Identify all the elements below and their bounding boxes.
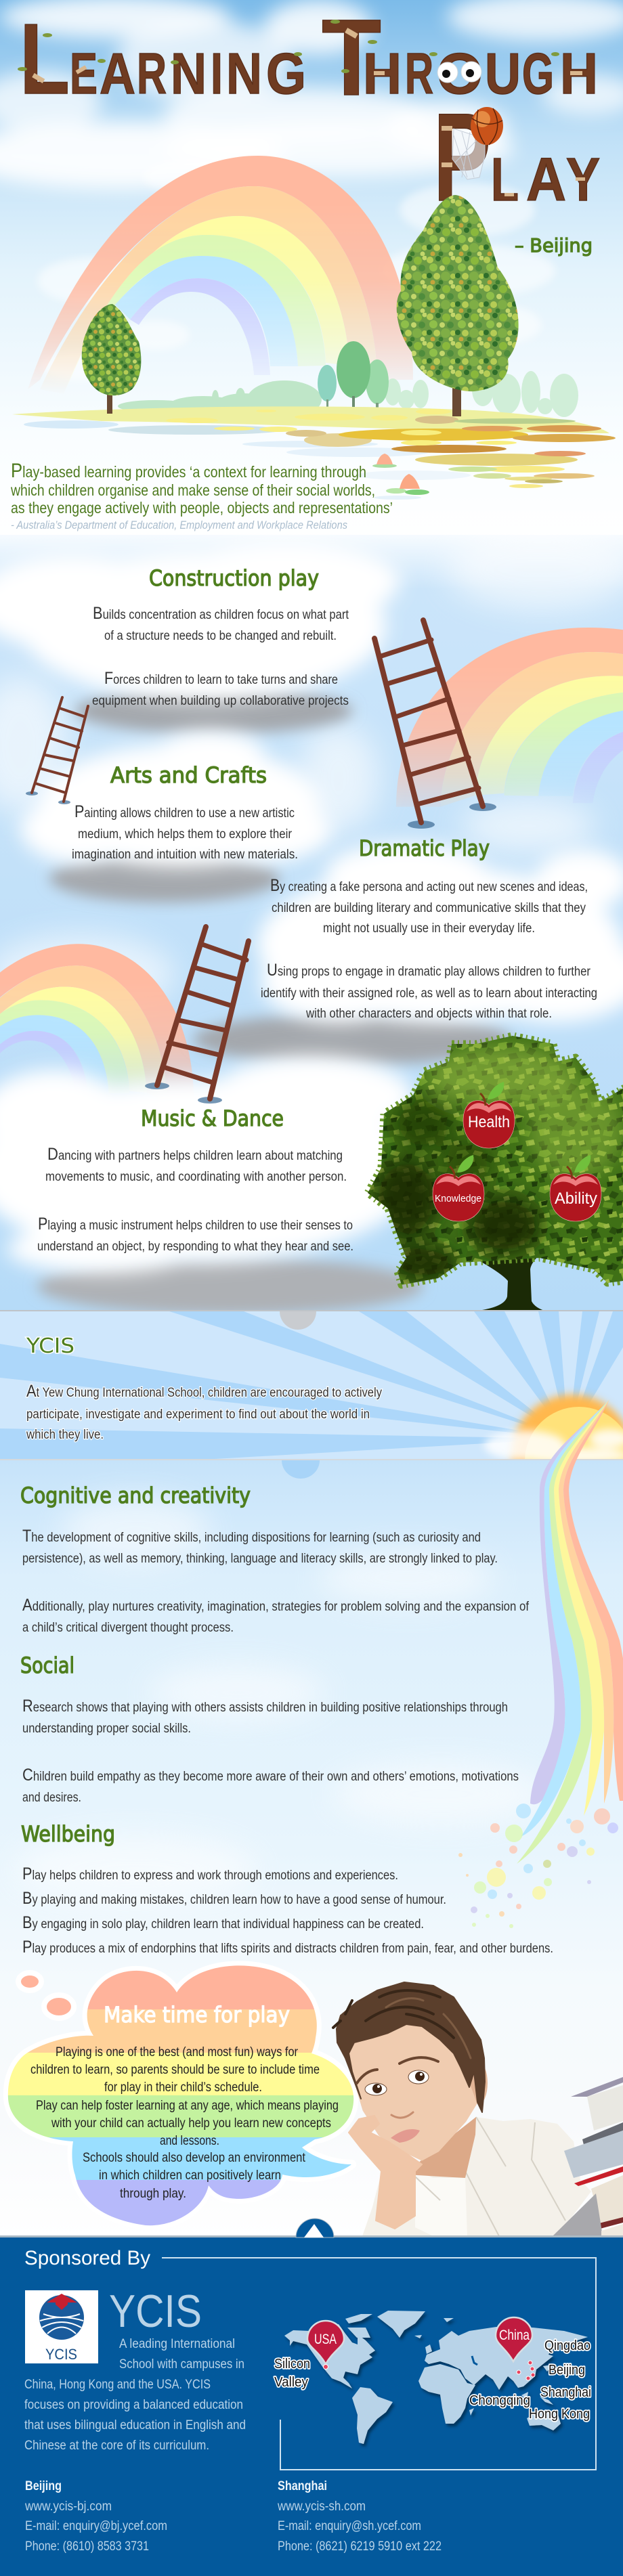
text block: construction play	[92, 604, 349, 708]
text block: cognitive: The development of cognitive skills, including dispositions for learning (such as curiosity and	[22, 1527, 481, 1546]
text block: dramatic play	[261, 876, 597, 1021]
text block: about YCIS: that uses bilingual education in English and	[24, 2418, 246, 2432]
labels: campus cities: Shanghai	[540, 2385, 591, 2400]
title: Learning Through Play: G	[266, 42, 306, 106]
text block: cognitive	[22, 1527, 530, 1635]
icon: large ladder	[374, 620, 496, 829]
icon: basketball and hoop	[452, 107, 503, 179]
heading: Social: Social	[20, 1653, 74, 1678]
text block: make time for play: in which children can positively learn	[99, 2168, 281, 2183]
text block: construction play: Forces children to learn to take turns and share	[104, 669, 338, 688]
title: Learning Through Play: I	[211, 42, 223, 106]
illustration: thinking boy	[333, 1982, 591, 2236]
text block: social: Children build empathy as they become more aware of their own and others’ emotions, motivations	[22, 1766, 519, 1785]
text block: dramatic play: might not usually use in their everyday life.	[323, 921, 535, 936]
panel: sponsor band	[0, 2219, 623, 2576]
text block: make time for play: with your child can actually help you learn new concepts	[51, 2116, 331, 2131]
illustration: landscape with background trees	[12, 341, 616, 500]
labels: campus cities: Beijing	[549, 2363, 585, 2378]
text block: cognitive: Additionally, play nurtures creativity, imagination, strategies for problem solving and the expansion of	[22, 1596, 530, 1615]
map: world	[284, 2311, 588, 2444]
heading: Sponsored By: Sponsored By	[24, 2247, 150, 2269]
text block: intro quote: Play-based learning provides ‘a context for learning through	[11, 460, 366, 482]
text block: construction play: Builds concentration as children focus on what part	[93, 604, 349, 623]
text block: about YCIS: A leading International	[119, 2337, 235, 2351]
apple: Ability	[550, 1155, 601, 1221]
text block: social: understanding proper social skills.	[22, 1722, 191, 1736]
labels: campus cities	[274, 2338, 591, 2422]
text block: social: and desires.	[22, 1791, 81, 1805]
contact: Shanghai	[277, 2479, 442, 2554]
logo: YCIS crest	[25, 2290, 98, 2363]
panel: cloud sky background	[0, 528, 623, 1311]
heading: Wellbeing: Wellbeing	[21, 1821, 115, 1847]
decoration: paint splash dots	[458, 1804, 618, 1928]
panel: YCIS sunburst band	[0, 1310, 623, 1516]
text block: social	[22, 1697, 519, 1805]
icon: thought bubble dots	[18, 1973, 74, 2018]
title: Learning Through Play: N	[226, 42, 262, 106]
text block: wellbeing: Play helps children to express and work through emotions and experiences.	[22, 1864, 398, 1883]
contact: Beijing: Phone: (8610) 8583 3731	[25, 2539, 149, 2554]
rainbow: right side	[396, 628, 623, 818]
illustration: apple tree	[359, 1032, 623, 1311]
icon: small ladder	[26, 697, 88, 804]
contact: Shanghai: E-mail: enquiry@sh.ycef.com	[278, 2519, 421, 2533]
text block: make time for play: through play.	[120, 2187, 186, 2201]
text block: intro quote: as they engage actively with people, objects and representations’	[11, 499, 393, 517]
marker: USA pin	[307, 2321, 344, 2364]
text block: YCIS intro: participate, investigate and experiment to find out about the world in	[26, 1407, 370, 1422]
panel: hero sky background	[0, 0, 623, 542]
labels: campus cities: Chongqing	[469, 2393, 530, 2408]
text block: make time for play: and lessons.	[160, 2134, 219, 2148]
text block: about YCIS	[24, 2337, 246, 2453]
title: Learning Through Play: O	[437, 42, 483, 106]
title: Learning Through Play: R	[137, 42, 167, 106]
heading: YCIS: YCIS	[26, 1334, 74, 1358]
text block: cognitive: a child’s critical divergent thought process.	[22, 1621, 234, 1635]
text block: cognitive: persistence), as well as memory, thinking, language and literacy skills, are strongly linked to play.	[22, 1552, 498, 1566]
text block: arts and crafts: Painting allows children to use a new artistic	[74, 802, 295, 821]
labels: campus cities: Silicon	[274, 2357, 310, 2372]
title: Learning Through Play: Y	[566, 146, 600, 214]
heading: Cognitive and creativity: Cognitive and creativity	[20, 1483, 251, 1508]
text block: make time for play: Playing is one of the best (and most fun) ways for	[56, 2045, 299, 2059]
frame: map outline	[162, 2258, 596, 2470]
cloud: construction	[0, 542, 400, 734]
rainbow: ribbon from the sun	[517, 1399, 623, 1864]
text block: about YCIS: China, Hong Kong and the USA. YCIS	[24, 2378, 211, 2392]
rainbow: left side	[0, 944, 194, 1113]
heading: Construction play: Construction play	[149, 565, 319, 591]
contact: Beijing: www.ycis-bj.com	[24, 2499, 112, 2514]
title: Learning Through Play: G	[522, 42, 554, 106]
heading: Make time for play: Make time for play	[104, 2002, 290, 2028]
apple: Health	[463, 1082, 515, 1148]
contact: Shanghai: www.ycis-sh.com	[277, 2499, 366, 2514]
text block: dramatic play: children are building literary and communicative skills that they	[272, 901, 586, 915]
icon: small tree	[82, 304, 141, 414]
text block: intro quote: - Australia’s Department of Education, Employment and Workplace Relations	[11, 519, 347, 531]
text block: arts and crafts: medium, which helps them to explore their	[78, 827, 293, 842]
title: Learning Through Play: T	[322, 0, 381, 118]
cloud: dramatic play	[193, 843, 623, 1065]
text block: make time for play: for play in their child’s schedule.	[104, 2080, 262, 2095]
heading: Arts and Crafts: Arts and Crafts	[110, 762, 267, 788]
text block: social: Research shows that playing with others assists children in building positive relationships through	[22, 1697, 508, 1716]
apple: Health: Health	[468, 1113, 510, 1131]
title: Learning Through Play: A	[526, 146, 566, 214]
heading: Dramatic Play: Dramatic Play	[359, 835, 490, 861]
text block: intro quote: which children organise and make sense of their social worlds,	[10, 481, 375, 499]
text block: wellbeing: Play produces a mix of endorphins that lifts spirits and distracts children from pain, fear, and other burdens.	[22, 1938, 553, 1957]
text block: music and dance: understand an object, by responding to what they hear and see.	[37, 1240, 353, 1254]
text block: make time for play: Schools should also develop an environment	[83, 2151, 306, 2165]
contact: Beijing: E-mail: enquiry@bj.ycef.com	[25, 2519, 167, 2533]
text block: about YCIS: Chinese at the core of its curriculum.	[24, 2439, 209, 2453]
title: Learning Through Play	[18, 0, 600, 227]
text block: music and dance: Playing a music instrument helps children to use their senses to	[38, 1215, 353, 1234]
contact: Shanghai: Phone: (8621) 6219 5910 ext 222	[278, 2539, 442, 2554]
title: Learning Through Play: R	[405, 42, 433, 106]
text block: make time for play: Play can help foster learning at any age, which means playing	[36, 2099, 339, 2113]
apple: Ability: Ability	[555, 1189, 597, 1208]
text block: dramatic play: with other characters and objects within that role.	[305, 1007, 552, 1021]
labels: campus cities: Valley	[274, 2375, 308, 2390]
icon: googly eyes on the O	[437, 62, 481, 83]
title: Learning Through Play: L	[491, 146, 519, 214]
contact: Beijing: Beijing	[25, 2479, 62, 2493]
text block: YCIS intro: which they live.	[26, 1428, 104, 1442]
rainbow: hero	[28, 156, 413, 394]
cloud: arts and crafts	[20, 731, 332, 902]
text block: music and dance	[37, 1145, 353, 1254]
text block: music and dance: movements to music, and coordinating with another person.	[45, 1170, 347, 1184]
text block: construction play: of a structure needs to be changed and rebuilt.	[104, 629, 337, 643]
text block: wellbeing	[22, 1864, 553, 1957]
title: Learning Through Play: E	[70, 42, 98, 106]
text block: wellbeing: By engaging in solo play, children learn that individual happiness can be created.	[22, 1913, 424, 1932]
text block: intro quote	[10, 460, 393, 531]
title: Learning Through Play: H	[560, 42, 598, 106]
subtitle: Beijing: – Beijing	[515, 234, 593, 257]
text block: arts and crafts: imagination and intuition with new materials.	[72, 848, 298, 862]
text block: wellbeing: By playing and making mistakes, children learn how to have a good sense of humour.	[22, 1889, 446, 1908]
illustration: stack of books	[553, 2077, 623, 2236]
title: Learning Through Play: H	[363, 42, 402, 106]
text block: make time for play	[30, 2045, 339, 2201]
text block: about YCIS: School with campuses in	[119, 2357, 244, 2372]
text block: construction play: equipment when building up collaborative projects	[92, 694, 349, 708]
text block: YCIS intro	[26, 1382, 382, 1442]
text block: make time for play: children to learn, so parents should be sure to include time	[30, 2063, 320, 2077]
text block: music and dance: Dancing with partners helps children learn about matching	[47, 1145, 343, 1164]
text block: arts and crafts	[72, 802, 298, 862]
icon: large tree	[397, 195, 519, 416]
marker: China pin: China	[499, 2328, 530, 2343]
title: Learning Through Play: A	[100, 42, 135, 106]
contact: Shanghai: Shanghai	[278, 2479, 327, 2493]
title: Learning Through Play: N	[171, 42, 207, 106]
markers: campus locations	[324, 2361, 535, 2380]
icon: middle ladder	[145, 927, 249, 1104]
labels: campus cities: Hong Kong	[529, 2407, 590, 2422]
heading: YCIS wordmark: YCIS	[109, 2286, 202, 2337]
labels: campus cities: Qingdao	[544, 2338, 590, 2353]
heading: Music and Dance: Music & Dance	[141, 1106, 284, 1131]
contact: Beijing	[24, 2479, 167, 2554]
icon: water lilies	[372, 454, 429, 495]
title: Learning Through Play: U	[485, 42, 521, 106]
text block: about YCIS: focuses on providing a balanced education	[24, 2398, 243, 2412]
title: Learning Through Play: P	[433, 88, 491, 227]
panel: make time for play bubble	[0, 1960, 366, 2231]
apple: Knowledge: Knowledge	[435, 1193, 481, 1204]
logo: YCIS crest: YCIS	[45, 2346, 77, 2363]
apple: Knowledge	[433, 1155, 484, 1221]
marker: China pin	[496, 2317, 532, 2361]
text block: YCIS intro: At Yew Chung International School, children are encouraged to actively	[26, 1382, 382, 1401]
marker: USA pin: USA	[314, 2332, 337, 2347]
cloud: music and dance	[0, 1056, 423, 1315]
title: Learning Through Play: L	[20, 3, 70, 115]
panel: child development background	[0, 1460, 623, 2237]
